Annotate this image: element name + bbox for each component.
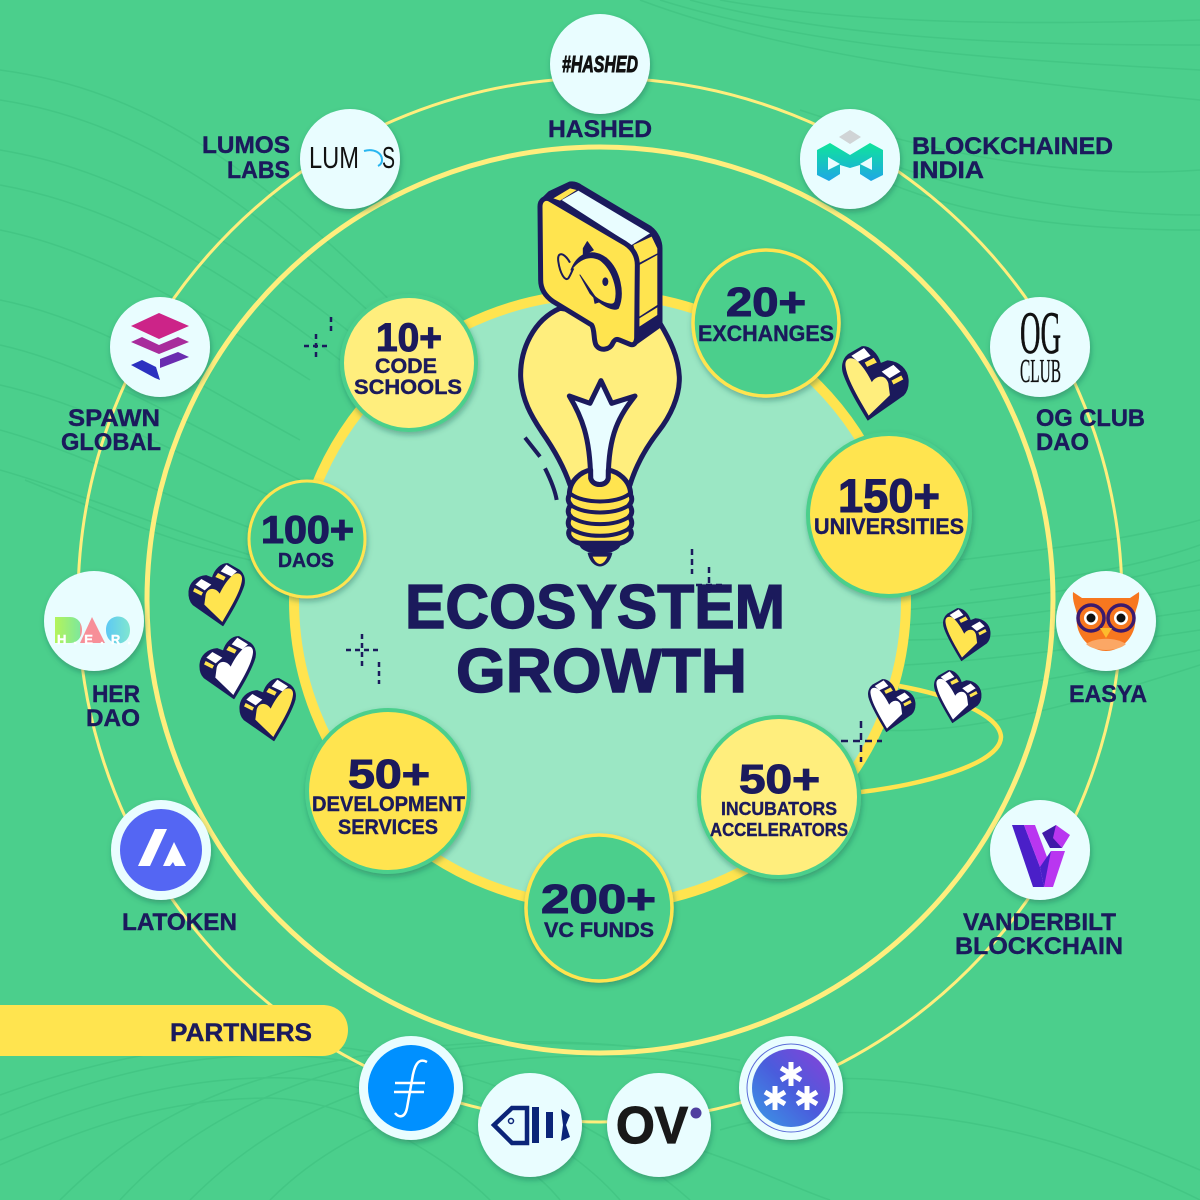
partner: og club: OG xyxy=(1020,300,1061,366)
label: her dao: HER xyxy=(92,681,140,708)
stat: daos: 100+ xyxy=(261,509,354,552)
partner: spawn global xyxy=(110,297,210,397)
light bulb icon xyxy=(521,308,679,566)
stat: development services: DEVELOPMENT xyxy=(312,793,465,816)
stat: exchanges xyxy=(693,250,839,396)
stat: incubators accelerators xyxy=(699,717,859,877)
title: GROWTH xyxy=(456,637,747,706)
label: vanderbilt blockchain xyxy=(955,909,1123,960)
stat: exchanges: 20+ xyxy=(726,279,806,325)
partner: og club xyxy=(990,297,1090,397)
stat: daos xyxy=(249,481,365,597)
partner: og club: CLUB xyxy=(1020,353,1061,390)
stat: vc funds: 200+ xyxy=(541,876,656,922)
label: vanderbilt blockchain: VANDERBILT xyxy=(963,909,1116,936)
label: her dao xyxy=(86,681,140,732)
hearts xyxy=(189,347,990,741)
label: hashed: HASHED xyxy=(548,116,652,143)
partner: snowflake xyxy=(739,1036,843,1140)
stat: development services: 50+ xyxy=(348,751,430,797)
label: blockchained india xyxy=(912,133,1113,184)
label: og club dao: OG CLUB xyxy=(1036,405,1145,432)
partner: lumos xyxy=(300,109,400,209)
stat: incubators accelerators: INCUBATORS xyxy=(721,799,837,819)
label: og club dao: DAO xyxy=(1036,429,1089,456)
stat: code schools: 10+ xyxy=(376,316,442,360)
stat: development services xyxy=(307,710,469,872)
partner: her dao: H.E.R. xyxy=(57,632,131,647)
partner: filecoin xyxy=(359,1036,463,1140)
stat: code schools: CODE xyxy=(375,355,437,378)
title: ECOSYSTEM xyxy=(405,573,785,642)
partner: arrow fish xyxy=(478,1073,582,1177)
label: spawn global: SPAWN xyxy=(68,405,160,432)
partner: latoken xyxy=(111,800,211,900)
outer ring xyxy=(78,78,1122,1122)
partner: her dao xyxy=(44,571,144,671)
label: lumos labs: LABS xyxy=(227,157,290,184)
stat: code schools xyxy=(342,296,476,430)
sparkles xyxy=(304,317,882,762)
partner: lumos: LUM xyxy=(309,140,359,175)
partner: blockchained india xyxy=(800,109,900,209)
stat: universities xyxy=(808,434,970,596)
stat: daos: DAOS xyxy=(278,550,334,572)
label: vanderbilt blockchain: BLOCKCHAIN xyxy=(955,933,1123,960)
partners banner: PARTNERS xyxy=(170,1019,312,1047)
stat: exchanges: EXCHANGES xyxy=(698,321,834,346)
partner: vanderbilt xyxy=(990,800,1090,900)
label: lumos labs: LUMOS xyxy=(202,132,290,159)
partners banner xyxy=(0,1005,348,1056)
partner: lumos: S xyxy=(382,140,395,175)
label: spawn global: GLOBAL xyxy=(61,429,161,456)
stat: development services: SERVICES xyxy=(338,816,438,839)
label: latoken: LATOKEN xyxy=(122,909,237,936)
stat: incubators accelerators: 50+ xyxy=(739,756,820,802)
speech sign icon xyxy=(540,184,660,349)
label: og club dao xyxy=(1036,405,1145,456)
stat: vc funds: VC FUNDS xyxy=(544,919,654,942)
partner: easya xyxy=(1056,571,1156,671)
partner: ov: OV xyxy=(616,1097,688,1155)
inner disc xyxy=(294,294,906,906)
label: spawn global xyxy=(61,405,161,456)
label: lumos labs xyxy=(202,132,290,184)
label: easya: EASYA xyxy=(1069,681,1147,708)
partner: hashed: #HASHED xyxy=(562,51,638,77)
stat: incubators accelerators: ACCELERATORS xyxy=(710,820,848,840)
stat: code schools: SCHOOLS xyxy=(354,376,462,399)
middle ring xyxy=(147,147,1053,1053)
partner: hashed xyxy=(550,14,650,114)
partner: ov xyxy=(607,1073,711,1177)
label: blockchained india: INDIA xyxy=(912,157,984,184)
label: blockchained india: BLOCKCHAINED xyxy=(912,133,1113,160)
stat: universities: UNIVERSITIES xyxy=(814,514,964,539)
stat: universities: 150+ xyxy=(838,469,940,522)
stat: vc funds xyxy=(526,835,672,981)
loop arrow xyxy=(861,686,1001,792)
label: her dao: DAO xyxy=(86,705,140,732)
title xyxy=(405,573,785,706)
